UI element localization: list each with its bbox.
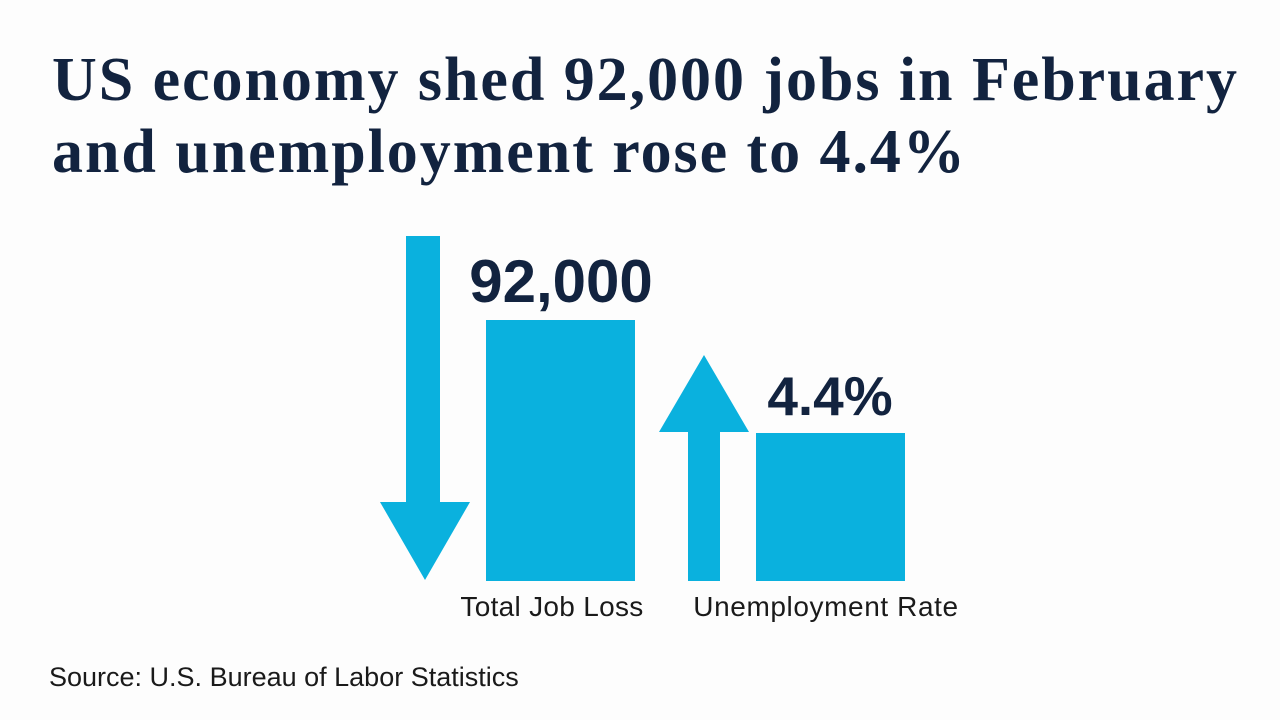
value: 92,000: 92,000 xyxy=(469,248,653,315)
source: Source: U.S. Bureau of Labor Statistics xyxy=(49,662,519,692)
bar: unemployment rate xyxy=(756,433,905,581)
title: US economy shed 92,000 jobs in February xyxy=(52,46,1239,114)
value: 4.4%: 4.4% xyxy=(767,365,893,427)
label: unemployment rate: Unemployment Rate xyxy=(693,591,959,622)
title xyxy=(52,46,1239,186)
label: total job loss: Total Job Loss xyxy=(460,591,644,622)
bar: total job loss xyxy=(486,320,635,581)
arrow: down xyxy=(380,236,470,580)
arrow: up xyxy=(659,355,749,581)
title: and unemployment rose to 4.4% xyxy=(52,118,967,186)
